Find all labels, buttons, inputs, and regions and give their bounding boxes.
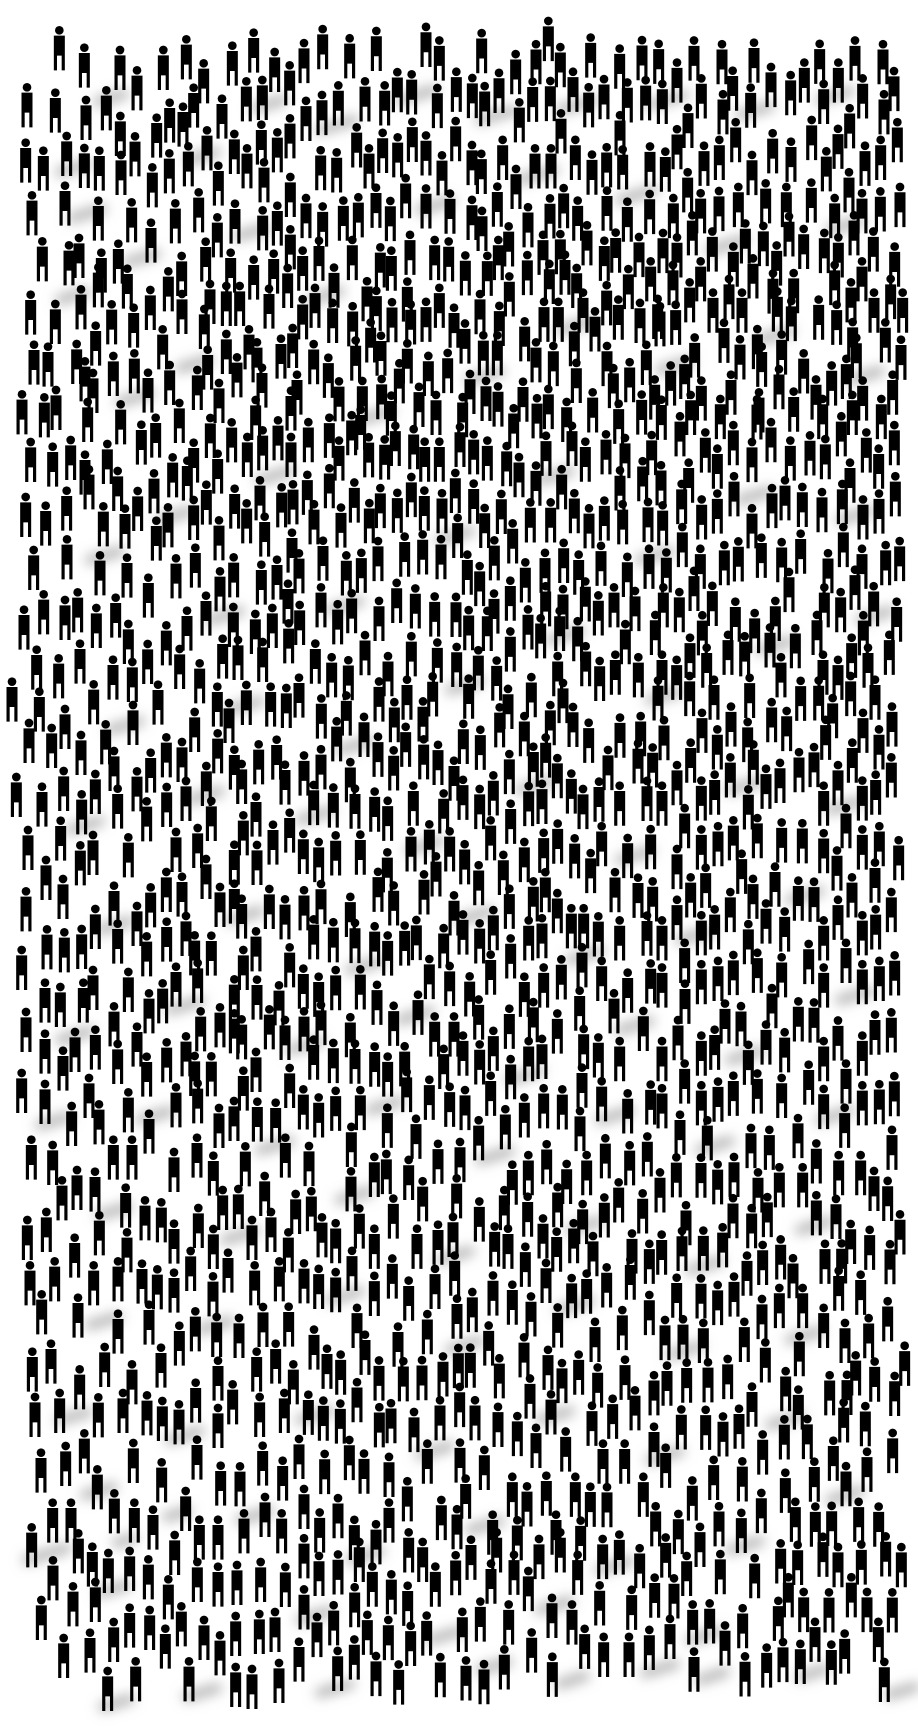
crowd region: bottom centre	[304, 1154, 607, 1664]
crowd region: top left	[26, 30, 290, 295]
crowd region: bottom right	[613, 1155, 905, 1662]
crowd region: middle left	[16, 703, 290, 1092]
crowd region: top centre	[303, 21, 607, 566]
crowd region: bottom left	[32, 1503, 299, 1671]
crowd region: upper left	[12, 304, 300, 692]
crowd region: middle right	[614, 586, 899, 1145]
crowd region: lower left	[27, 1101, 299, 1497]
crowd region: top right	[613, 40, 903, 572]
crowd region: middle centre	[303, 581, 608, 1146]
